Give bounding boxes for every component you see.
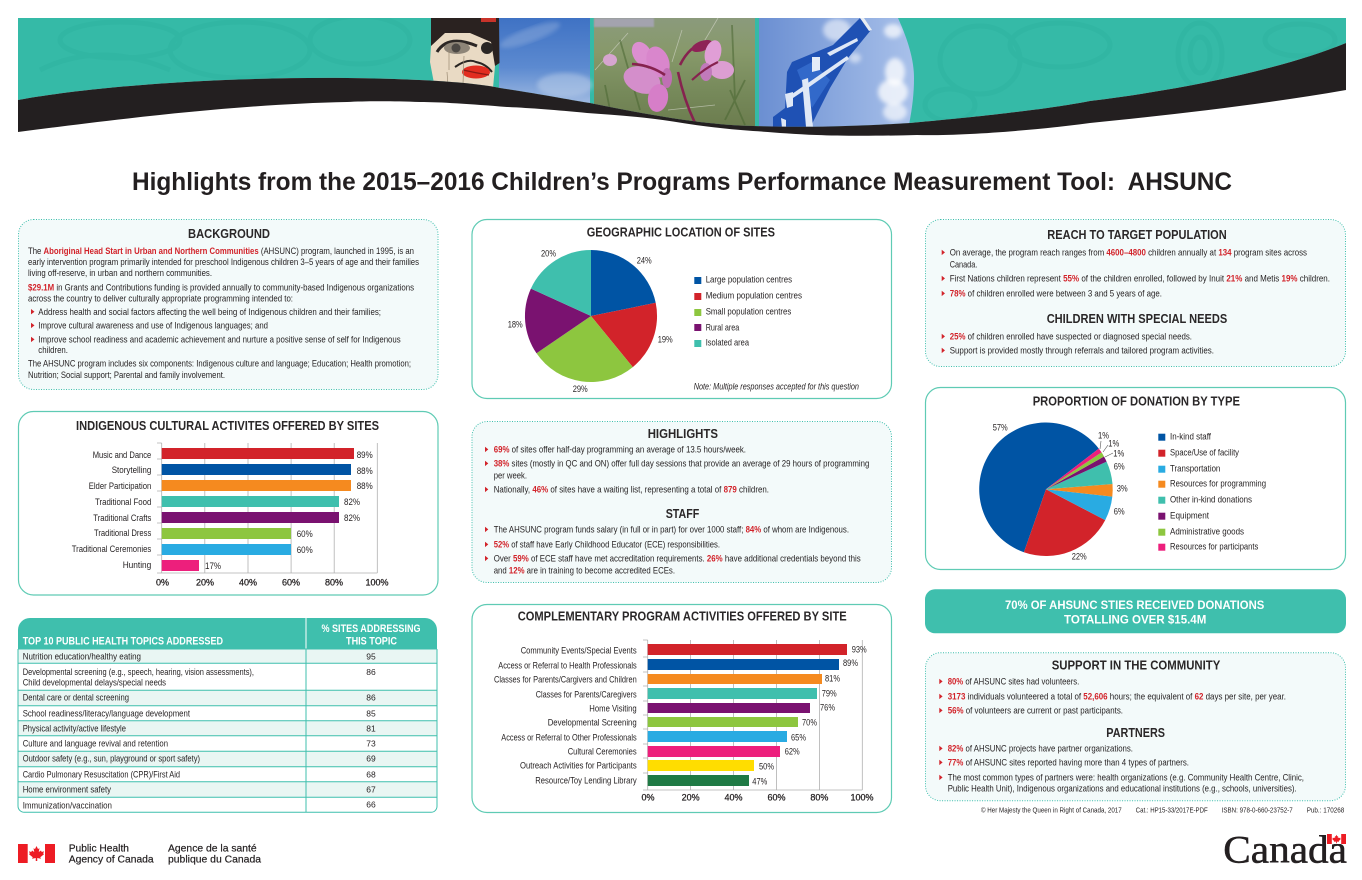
pie chart: donation by type: 6% (1114, 462, 1125, 472)
panel: complementary program activities (472, 604, 892, 812)
pie chart: donation by type (979, 423, 1128, 562)
text block: support bullets (939, 677, 1286, 716)
callout: donations total: 70% OF AHSUNC STIES RECEIVED DONATIONS (1005, 598, 1264, 612)
legend: donation by type: Space/Use of facility (1170, 448, 1239, 458)
photo: totem pole and sky (430, 17, 593, 108)
bar chart: cultural activities: Traditional Crafts (93, 513, 152, 523)
table rows: 95 (366, 652, 376, 662)
logo: Public Health Agency of Canada: publique du Canada (168, 854, 261, 866)
legend: geographic location: Medium population centres (706, 291, 802, 301)
text block: partners bullets: 82% of AHSUNC projects have partner organizations. (948, 744, 1133, 754)
logo: Public Health Agency of Canada (18, 843, 261, 866)
text block: reach bullets: First Nations children represent 55% of the children enrolled, followed by Inuit 21% and Metis 19% children. (950, 274, 1330, 284)
pie chart: donation by type: 1% (1098, 431, 1109, 441)
bar chart: complementary activities: Classes for Parents/Cargivers and Children (494, 675, 637, 685)
legend: geographic location: Large population centres (706, 275, 792, 285)
publication credits (981, 806, 1344, 815)
logo: Public Health Agency of Canada: Public Health (69, 843, 129, 855)
table rows: 81 (366, 724, 376, 734)
table rows: Cardio Pulmonary Resuscitation (CPR)/First Aid (23, 770, 180, 780)
publication credits: © Her Majesty the Queen in Right of Canada, 2017 (981, 806, 1122, 815)
legend: geographic location: Isolated area (706, 338, 749, 348)
bar chart: complementary activities: 100% (850, 793, 874, 803)
bar chart: cultural activities: 89% (357, 450, 373, 460)
panel: reach and special needs (926, 220, 1346, 366)
pie chart: geographic location: 20% (541, 249, 556, 259)
table rows: 66 (366, 799, 376, 809)
publication credits: ISBN: 978-0-660-23752-7 (1222, 806, 1293, 815)
text block: partners bullets: Public Health Unit), Indigenous organizations and educational institutions (e.g., schools, universities). (948, 784, 1297, 794)
heading: donation by type: PROPORTION OF DONATION BY TYPE (1033, 395, 1240, 409)
bar chart: complementary activities: 79% (822, 689, 837, 699)
bar chart: complementary activities: 65% (791, 733, 806, 743)
bar chart: cultural activities: Storytelling (112, 465, 151, 475)
panel: indigenous cultural activities (18, 412, 438, 595)
panel: support in the community and partners (926, 653, 1346, 801)
bar chart: complementary activities: Home Visiting (589, 704, 637, 714)
panel: background (18, 220, 438, 390)
table rows: Culture and language revival and retention (23, 739, 168, 749)
bar chart: cultural activities: Music and Dance (93, 450, 151, 460)
table rows: 85 (366, 709, 376, 719)
text block: partners bullets: The most common types of partners were: health organizations (e.g. Community Health Centre, Clinic, (948, 773, 1304, 783)
bar chart: complementary activities: 62% (785, 747, 800, 757)
panel: geographic location of sites (472, 220, 892, 398)
text block: program description: Improve school readiness and academic achievement and nurture a positive sense of self for Indigenous (38, 335, 401, 345)
pie chart: donation by type: 22% (1072, 552, 1087, 562)
bar chart: complementary activities: 50% (759, 762, 774, 772)
text block: reach bullets: Canada. (950, 260, 977, 270)
legend: geographic location: Small population centres (706, 307, 792, 317)
bar chart: cultural activities: 20% (196, 578, 214, 588)
text block: special needs bullets: Support is provided mostly through referrals and tailored program activities. (950, 346, 1214, 356)
heading: children with special needs: CHILDREN WITH SPECIAL NEEDS (1047, 312, 1227, 326)
table rows: Dental care or dental screening (23, 693, 129, 703)
table header: TOP 10 PUBLIC HEALTH TOPICS ADDRESSED (23, 636, 223, 648)
bar chart: cultural activities: Traditional Ceremonies (72, 544, 152, 554)
bar chart: complementary activities: 40% (724, 793, 743, 803)
heading: reach to target population: REACH TO TARGET POPULATION (1047, 228, 1227, 242)
bar chart: cultural activities: 100% (365, 578, 389, 588)
pie chart: donation by type: 1% (1113, 449, 1124, 459)
bar chart: cultural activities: 60% (282, 578, 300, 588)
text block: program description: early intervention program primarily intended for preschool Indigenous children 3–5 years of age and their families (28, 257, 419, 267)
text block: highlights bullets: Nationally, 46% of sites have a waiting list, representing a total of 879 children. (494, 485, 769, 495)
text block: partners bullets: 77% of AHSUNC sites reported having more than 4 types of partners. (948, 758, 1189, 768)
black wave (18, 43, 1346, 136)
pie chart: donation by type: 57% (993, 423, 1008, 433)
legend: donation by type: Transportation (1170, 464, 1220, 474)
text block: highlights bullets: per week. (494, 471, 527, 481)
table rows: 73 (366, 739, 376, 749)
legend: geographic location: Rural area (706, 323, 739, 333)
text block: support bullets: 3173 individuals volunteered a total of 52,606 hours; the equivalent of 62 days per site, per year. (948, 692, 1286, 702)
text block: program description: The AHSUNC program includes six components: Indigenous culture and language; Education; Health promotion; (28, 359, 411, 369)
text block: program description: Nutrition; Social support; Parental and family involvement. (28, 370, 225, 380)
heading: highlights: HIGHLIGHTS (648, 427, 718, 441)
text block: reach bullets: On average, the program reach ranges from 4600–4800 children annually at 134 program sites across (950, 248, 1307, 258)
text block: special needs bullets (942, 332, 1214, 356)
text block: staff bullets: The AHSUNC program funds salary (in full or in part) for over 1000 staff; 84% of whom are Indigenous. (494, 525, 849, 535)
bar chart: complementary activities: Access or Referral to Health Professionals (498, 661, 637, 671)
photo: fireweed flower (594, 18, 755, 133)
bar chart: complementary activities: 89% (843, 658, 858, 668)
text block: staff bullets: 52% of staff have Early Childhood Educator (ECE) responsibilities. (494, 540, 720, 550)
bar chart: complementary activities: Developmental Screening (548, 718, 637, 728)
table header (18, 618, 437, 649)
bar chart: complementary activities: 20% (682, 793, 700, 803)
bar chart: complementary activities: Resource/Toy Lending Library (535, 776, 637, 786)
pie chart: geographic location (508, 249, 673, 394)
table rows: Nutrition education/healthy eating (23, 652, 141, 662)
logo: Public Health Agency of Canada: Agence de la santé (168, 843, 257, 855)
panel: proportion of donation by type (926, 388, 1346, 570)
text block: highlights bullets (485, 445, 869, 495)
publication credits: Cat.: HP15-33/2017E-PDF (1136, 806, 1208, 815)
header banner (18, 16, 1346, 136)
table rows: 86 (366, 693, 376, 703)
bar chart: complementary activities: 81% (825, 674, 840, 684)
bar chart: complementary activities: 60% (767, 793, 786, 803)
table header: THIS TOPIC (346, 636, 397, 648)
bar chart: complementary activities: Community Events/Special Events (521, 646, 637, 656)
callout: donations total (925, 589, 1346, 633)
publication credits: Pub.: 170268 (1307, 806, 1344, 815)
callout: donations total: TOTALLING OVER $15.4M (1064, 613, 1206, 627)
photo: flag against sky (759, 18, 915, 133)
table rows: 67 (366, 785, 376, 795)
bar chart: cultural activities: 82% (344, 497, 360, 507)
text block: program description: $29.1M in Grants and Contributions funding is provided annually to community-based Indigenous organizations (28, 283, 414, 293)
table rows: Immunization/vaccination (23, 800, 112, 810)
bar chart: complementary activities (494, 640, 874, 803)
table rows: Outdoor safety (e.g., sun, playground or sport safety) (23, 754, 200, 764)
legend: donation by type: Resources for programming (1170, 479, 1266, 489)
pie chart: geographic location: 29% (573, 384, 588, 394)
bar chart: cultural activities: 40% (239, 578, 257, 588)
table header: % SITES ADDRESSING (322, 623, 420, 635)
bar chart: cultural activities: 60% (297, 529, 313, 539)
bar chart: cultural activities: 88% (357, 481, 373, 491)
table rows: 68 (366, 770, 376, 780)
text block: staff bullets: Over 59% of ECE staff have met accreditation requirements. 26% have additional credentials beyond this (494, 554, 861, 564)
legend: donation by type: Equipment (1170, 511, 1209, 521)
text block: support bullets: 80% of AHSUNC sites had volunteers. (948, 677, 1079, 687)
pie chart: donation by type: 6% (1114, 507, 1125, 517)
heading: geographic location: GEOGRAPHIC LOCATION OF SITES (587, 226, 775, 240)
logo: Canada wordmark: Canada (1223, 829, 1347, 872)
bar chart: complementary activities: Classes for Parents/Caregivers (536, 690, 637, 700)
text block: support bullets: 56% of volunteers are current or past participants. (948, 706, 1123, 716)
text block: staff bullets: and 12% are in training to become accredited ECEs. (494, 566, 675, 576)
pie chart: geographic location: 18% (508, 320, 523, 330)
table rows: Child developmental delays/special needs (23, 677, 166, 687)
pie chart: geographic location: 24% (637, 255, 652, 265)
heading: partners: PARTNERS (1106, 726, 1165, 740)
text block: program description: children. (38, 345, 68, 355)
table: top 10 public health topics (18, 618, 437, 812)
heading: support in the community: SUPPORT IN THE COMMUNITY (1052, 659, 1221, 673)
text block: partners bullets (939, 744, 1304, 794)
text block: highlights bullets: 69% of sites offer half-day programming an average of 13.5 hours/week. (494, 445, 746, 455)
text block: program description: The Aboriginal Head Start in Urban and Northern Communities (AHSUNC) program, launched in 1995, is an (28, 246, 414, 256)
table rows: 69 (366, 754, 376, 764)
text block: staff bullets (485, 525, 861, 576)
bar chart: cultural activities: Elder Participation (89, 481, 151, 491)
text block: program description: Address health and social factors affecting the well being of Indigenous children and their families; (38, 307, 381, 317)
bar chart: cultural activities: 80% (325, 578, 343, 588)
logo: Public Health Agency of Canada: Agency of Canada (69, 854, 154, 866)
legend: donation by type (1158, 432, 1266, 552)
table rows (23, 652, 376, 810)
title: Highlights from the 2015–2016 Children’s Programs Performance Measurement Tool: AHSUNC (132, 168, 1232, 196)
heading: indigenous cultural activities: INDIGENOUS CULTURAL ACTIVITES OFFERED BY SITES (76, 419, 379, 433)
note: Note: Multiple responses accepted for this question (694, 382, 859, 392)
table rows: School readiness/literacy/language development (23, 709, 190, 719)
legend: donation by type: Resources for participants (1170, 542, 1259, 552)
text block: reach bullets: 78% of children enrolled were between 3 and 5 years of age. (950, 289, 1162, 299)
bar chart: cultural activities: 60% (297, 545, 313, 555)
bar chart: complementary activities: 47% (752, 777, 767, 787)
pie chart: geographic location: 19% (658, 335, 673, 345)
text block: program description: Improve cultural awareness and use of Indigenous languages; and (38, 321, 268, 331)
heading: staff: STAFF (666, 507, 700, 521)
bar chart: complementary activities: Outreach Activities for Participants (520, 761, 637, 771)
text block: program description: across the country to deliver culturally appropriate programming intended to: (28, 294, 293, 304)
heading: complementary activities: COMPLEMENTARY PROGRAM ACTIVITIES OFFERED BY SITE (518, 610, 847, 624)
bar chart: cultural activities: Hunting (123, 560, 151, 570)
bar chart: cultural activities: 0% (156, 578, 169, 588)
bar chart: complementary activities: 76% (820, 703, 835, 713)
bar chart: complementary activities: 0% (641, 793, 655, 803)
bar chart: cultural activities: Traditional Food (95, 497, 151, 507)
bar chart: complementary activities: Access or Referral to Other Professionals (501, 733, 637, 743)
text block: special needs bullets: 25% of children enrolled have suspected or diagnosed special needs. (950, 332, 1192, 342)
table rows: 86 (366, 667, 376, 677)
pie chart: donation by type: 1% (1108, 439, 1119, 449)
legend: donation by type: Other in-kind donations (1170, 495, 1252, 505)
bar chart: complementary activities: 80% (810, 793, 828, 803)
legend: donation by type: Administrative goods (1170, 527, 1244, 537)
legend: donation by type: In-kind staff (1170, 432, 1211, 442)
bar chart: cultural activities: Traditional Dress (94, 528, 152, 538)
table rows: Home environment safety (23, 785, 111, 795)
text block: highlights bullets: 38% sites (mostly in QC and ON) offer full day sessions that provide an average of 29 hours of programming (494, 459, 869, 469)
panel: highlights and staff (472, 422, 892, 582)
table rows: Developmental screening (e.g., speech, hearing, vision assessments), (23, 667, 254, 677)
pie chart: donation by type: 3% (1117, 484, 1128, 494)
legend: geographic location (694, 275, 802, 348)
bar chart: cultural activities (72, 443, 389, 588)
bar chart: complementary activities: 70% (802, 718, 817, 728)
heading: background: BACKGROUND (188, 227, 270, 241)
bar chart: cultural activities: 88% (357, 466, 373, 476)
bar chart: complementary activities: 93% (852, 645, 867, 655)
bar chart: cultural activities: 17% (205, 561, 221, 571)
bar chart: complementary activities: Cultural Ceremonies (568, 747, 637, 757)
table rows: Physical activity/active lifestyle (23, 724, 126, 734)
text block: program description (28, 246, 419, 380)
text block: program description: living off-reserve, in urban and northern communities. (28, 268, 212, 278)
bar chart: cultural activities: 82% (344, 513, 360, 523)
text block: reach bullets (942, 248, 1330, 299)
